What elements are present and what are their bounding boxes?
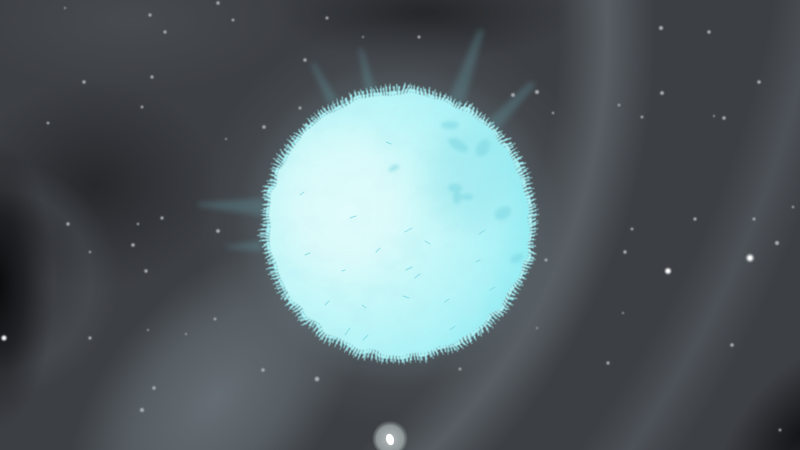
fuzzy cyan star <box>260 85 540 365</box>
surface mottling <box>276 119 522 342</box>
blue patches upper right <box>388 121 525 265</box>
bright field stars <box>1 254 754 341</box>
rays around star <box>198 30 536 252</box>
bright centre <box>288 138 398 267</box>
bottom companion star <box>373 421 407 450</box>
small dashes <box>300 142 495 340</box>
furry edge <box>262 87 536 361</box>
blue area upper right <box>428 125 512 225</box>
